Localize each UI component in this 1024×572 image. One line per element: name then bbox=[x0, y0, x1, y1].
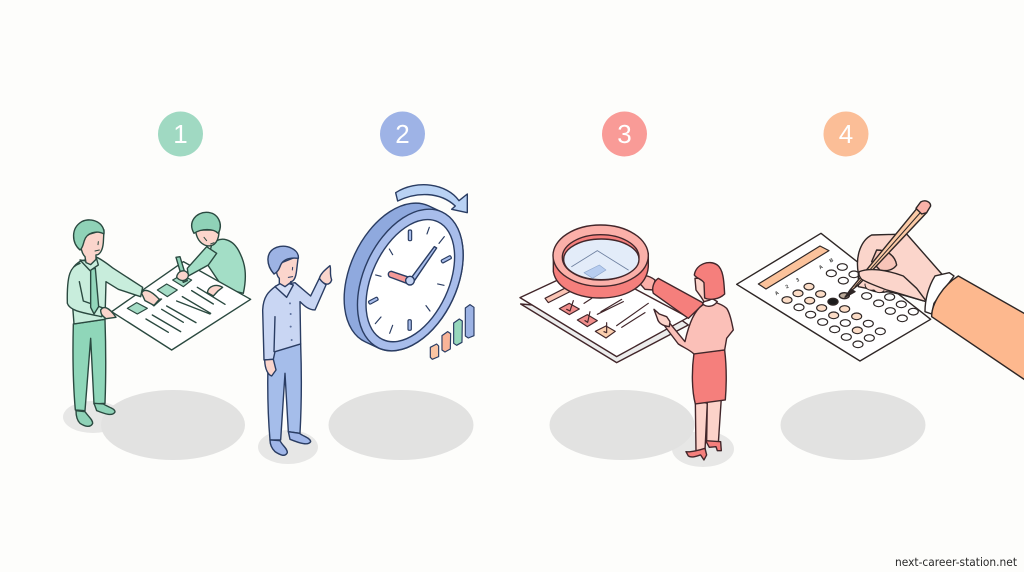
magnifying glass bbox=[553, 225, 704, 318]
illustration: answer sheet and hand with pencil bbox=[737, 201, 1024, 383]
answer sheet bbox=[737, 233, 931, 361]
illustration: magnifier over documents with woman bbox=[520, 225, 733, 460]
bar chart bbox=[430, 305, 474, 359]
seated person bbox=[192, 212, 245, 293]
step 1 number badge: 1 bbox=[173, 119, 188, 149]
woman figure bbox=[654, 263, 733, 460]
step 3 number badge: 3 bbox=[617, 119, 632, 149]
answer document bbox=[112, 262, 251, 350]
website credit: next-career-station.net bbox=[895, 555, 1017, 569]
step 2 number badge bbox=[380, 112, 425, 156]
sheet column labels: 2 bbox=[785, 284, 790, 290]
stacked documents bbox=[520, 265, 688, 363]
hand holding pencil bbox=[845, 201, 943, 302]
standing person bbox=[263, 246, 332, 455]
bubbles bbox=[782, 283, 862, 334]
illustration: two people reviewing a document bbox=[67, 212, 251, 426]
sheet column labels: B bbox=[829, 257, 835, 264]
standing person bbox=[67, 220, 159, 426]
step 4 number badge bbox=[824, 112, 868, 156]
shadow under step 4 bbox=[780, 390, 926, 460]
curved arrow bbox=[396, 185, 467, 213]
sheet column labels: A bbox=[818, 264, 824, 271]
shadows under step 2 bbox=[258, 390, 474, 464]
clock bbox=[323, 186, 484, 368]
shirt cuff and sleeve bbox=[925, 273, 1024, 383]
sheet column labels: 3 bbox=[795, 277, 801, 284]
seated person forearm, hands and pen bbox=[176, 247, 223, 296]
step 2 number badge: 2 bbox=[395, 119, 410, 149]
sheet column labels bbox=[774, 257, 835, 297]
shadows under step 3 bbox=[550, 390, 734, 467]
shadows under step 1 bbox=[63, 390, 245, 460]
step 4 number badge: 4 bbox=[839, 119, 853, 149]
step 1 number badge bbox=[158, 112, 203, 156]
step 3 number badge bbox=[602, 112, 647, 156]
illustration: clock with person and bars bbox=[263, 185, 484, 455]
sheet column labels: A bbox=[774, 290, 780, 297]
